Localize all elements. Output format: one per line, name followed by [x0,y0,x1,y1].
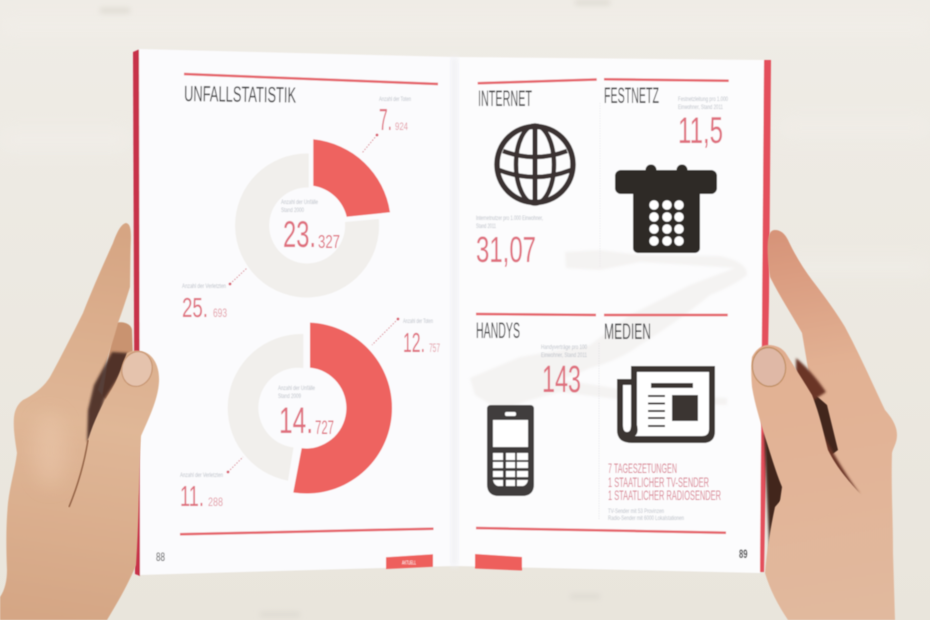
ring: Verletzte 2009 [228,334,303,481]
middle finger [100,322,133,410]
icon: telephone [615,164,717,253]
palm highlight [34,414,66,486]
Festnetz stat value: 11,5 [678,110,723,151]
callout: Verletzte 2009: 11. [180,481,204,513]
callout: Tote 2000: 7. [379,102,392,137]
ghost background image [470,250,747,410]
index finger and palm [765,230,897,620]
rule Festnetz [604,79,729,81]
Festnetz stat label [678,97,728,111]
centre label 2009: Anzahl der Unfälle [278,386,315,392]
crease [69,440,88,507]
centre label 2009: Stand 2009 [278,394,301,400]
callout: Tote 2009 [372,318,440,358]
centre label 2000: 23. [283,214,316,255]
thumbnail [118,348,156,390]
icon: globe [497,125,573,204]
centre label 2009: 727 [315,418,334,439]
callout: Verletzte 2000: 693 [213,306,227,320]
panel: Internet: INTERNET [478,86,532,111]
centre label 2009: 14. [279,400,313,441]
thumb [751,345,862,520]
centre label 2009 [278,386,334,441]
column dividers [599,103,601,267]
Internet stat label: Internetnutzer pro 1.000 Einwohner, [476,216,543,222]
Handys stat label: Einwohner, Stand 2011 [541,353,587,359]
gap between fingers [87,352,128,442]
panel: Internet [476,80,597,270]
cover edge right [725,60,771,572]
cover edge left [133,49,140,576]
donut chart 2009 [228,323,392,494]
rule Handys [476,314,596,315]
heading: Unfallstatistik: UNFALLSTATISTIK [184,81,296,108]
left page [139,49,455,575]
wedge: Tote 2000 [313,139,390,217]
media counts: 1 STAATLICHER RADIOSENDER [608,487,721,503]
icon: mobile phone [487,405,534,496]
ring: Verletzte 2000 [235,153,379,297]
gap between fingers [796,358,860,494]
column divider lower [598,343,600,520]
heading: Medien: MEDIEN [604,319,651,344]
right page [455,57,764,573]
open booklet [133,49,771,576]
callout: Tote 2000: Anzahl der Toten [379,97,411,103]
centre label 2000: Stand 2000 [281,208,304,214]
Internet stat value: 31,07 [476,229,536,270]
shadow behind thumb [764,380,862,560]
media counts: 7 TAGESZETUNGEN [608,460,677,476]
icon: newspaper [617,366,715,443]
panel: Festnetz [604,79,729,253]
callout: Verletzte 2000: Anzahl der Verletzten [182,284,226,290]
rule Internet [478,80,597,83]
callout: Tote 2000 [362,97,411,153]
wedge: Tote 2009 [293,323,392,494]
Handys stat value: 143 [542,359,581,401]
top rule left page [184,74,438,84]
callout: Verletzte 2009: Anzahl der Verletzten [180,473,223,479]
callout: Tote 2009: 757 [429,341,440,355]
callout: Verletzte 2009: 288 [208,495,223,509]
bottom rule left page [180,529,434,534]
media counts [608,460,721,503]
thumb [69,351,159,510]
Internet stat label: Stand 2011 [476,224,496,230]
callout: Verletzte 2000 [182,268,247,323]
media footnote: Radio-Sender mit 6000 Lokalstationen [608,516,684,522]
index finger and palm [0,223,140,620]
centre label 2000: 327 [318,232,340,252]
panel: Handys: HANDYS [476,318,520,343]
Festnetz stat label: Festnetzleitung pro 1.000 [678,97,728,103]
media footnote [608,509,684,522]
thumbnail [750,345,788,389]
callout: Verletzte 2000: 25. [182,292,208,323]
panel: Medien [604,315,728,522]
callout: Verletzte 2009 [180,457,243,513]
red tab right page [475,554,522,570]
page number 89: 89 [739,547,748,561]
panel: Unfallstatistik [156,74,440,569]
panel: Handys [476,314,596,496]
page number 88: 88 [156,550,165,564]
media footnote: TV-Sender mit 53 Provinzen [608,509,664,515]
Internet stat label [476,216,543,230]
callout: Tote 2000: 924 [395,121,408,133]
media counts: 1 STAATLICHER TV-SENDER [608,474,709,490]
centre label 2000: Anzahl der Unfälle [281,200,318,206]
callout: Tote 2009: Anzahl der Toten [403,319,433,325]
rule Medien [604,314,728,316]
red tab: Aktuell [386,554,433,569]
Handys stat label: Handyverträge pro 100 [541,345,587,351]
donut chart 2000 [235,139,390,297]
centre label 2000 [281,200,340,255]
panel: Festnetz: FESTNETZ [604,83,659,108]
red tab: Aktuell: AKTUELL [402,560,416,566]
right hand [750,230,897,620]
bottom rule right page [476,528,726,533]
Handys stat label [541,345,587,359]
left hand [0,223,159,620]
callout: Tote 2009: 12. [403,327,425,358]
spine shadow [451,57,458,566]
Festnetz stat label: Einwohner, Stand 2011 [678,105,723,111]
